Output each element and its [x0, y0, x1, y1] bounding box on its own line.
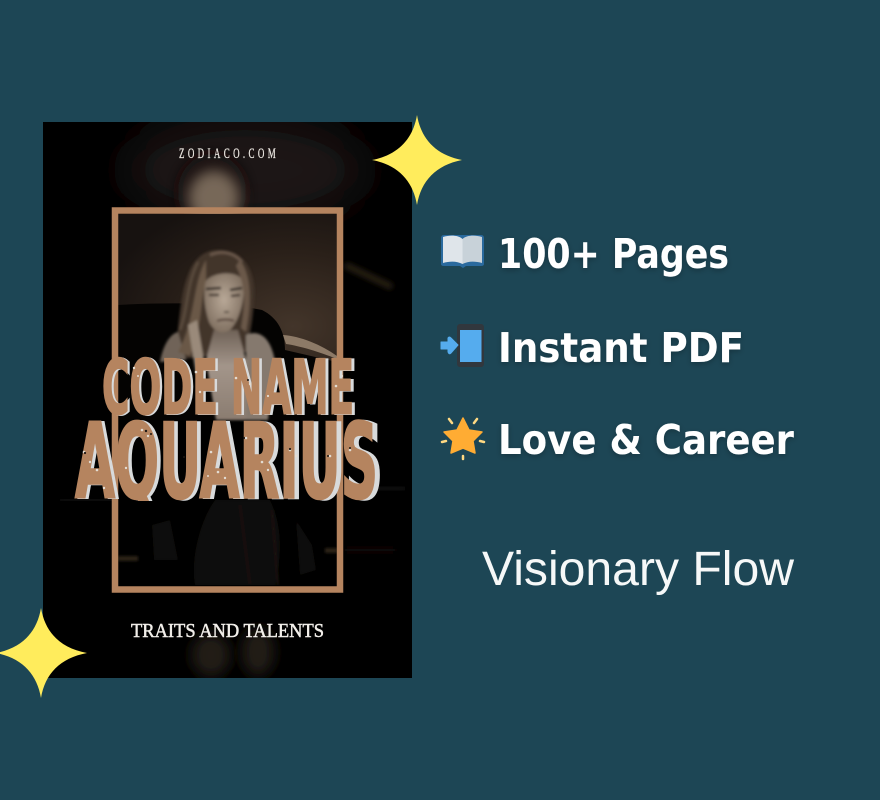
distress specks: [83, 367, 357, 489]
shoulders and chest: [160, 332, 186, 362]
feature: instant pdf: Instant PDF: [498, 324, 744, 372]
icon: sparkle top right: [372, 115, 462, 205]
cover site name: ZODIACO.COM: [179, 145, 276, 162]
infographic canvas: [0, 115, 794, 698]
headline: aquarius: [74, 366, 380, 501]
icon: open book: [441, 235, 484, 268]
headline: code name: CODE NAME: [104, 344, 357, 432]
blurred background portrait: [60, 115, 405, 677]
panel: book cover: [43, 115, 412, 678]
framed photo: [115, 210, 340, 590]
cover subtitle: TRAITS AND TALENTS: [131, 621, 324, 642]
feature: 100+ pages: 100+ Pages: [498, 230, 729, 278]
tagline: Visionary Flow: [482, 543, 794, 596]
icon: sparkle bottom left: [0, 608, 87, 698]
chair: [118, 303, 332, 364]
hair back: [172, 250, 254, 360]
headline: code name: [102, 344, 357, 432]
headline: aquarius: AQUARIUS: [78, 403, 383, 523]
headline: code name: CODE NAME: [102, 344, 354, 432]
face: [204, 273, 244, 332]
hair strands: [178, 260, 206, 356]
icon: glowing star: [442, 418, 484, 459]
frame: [115, 210, 340, 590]
eyes, brows, nose, lips: [206, 288, 242, 290]
feature: love and career: Love & Career: [498, 416, 795, 464]
headline: aquarius: AQUARIUS: [75, 402, 378, 522]
faint dress: [118, 500, 337, 585]
icon: phone with arrow: [441, 324, 484, 367]
